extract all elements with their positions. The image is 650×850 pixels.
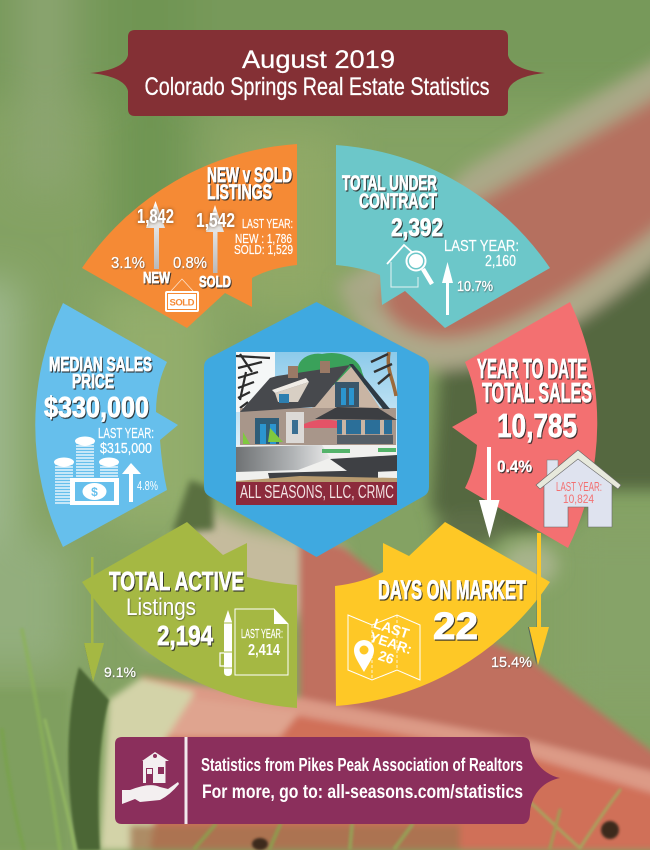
title line 2: Colorado Springs Real Estate Statistics [144, 73, 490, 101]
heading: DAYS ON MARKET [378, 575, 526, 605]
footer line 1: Statistics from Pikes Peak Association of Realtors [201, 755, 523, 775]
arrow down [479, 447, 500, 538]
last year [444, 238, 519, 270]
icon: map with last year: YEAR: [368, 629, 414, 657]
icon: coins and banknote: $ [91, 485, 98, 499]
arrow down [528, 533, 549, 665]
icon: house with last year: 10,824 [563, 492, 594, 506]
heading: MEDIAN SALES [49, 354, 152, 376]
icon: document with last year: LAST YEAR: [241, 626, 283, 641]
percent: 9.1% [104, 664, 136, 680]
logo banner: ALL SEASONS, LLC, CRMC [240, 482, 394, 502]
icon: document with last year: 2,414 [248, 642, 280, 659]
last year figures: LAST YEAR: [242, 217, 293, 231]
heading [342, 172, 437, 213]
arrow up [442, 262, 453, 315]
value: $330,000 [44, 392, 149, 424]
heading: TOTAL UNDER [342, 172, 437, 195]
last year: LAST YEAR: [98, 425, 154, 442]
icon: sold sign: SOLD [170, 298, 195, 308]
logo: house illustration [236, 352, 397, 484]
last year figures [234, 217, 293, 257]
panel: new v sold listings [82, 144, 297, 328]
percent: 15.4% [491, 654, 532, 671]
logo banner [236, 482, 397, 505]
panel: total active listings [82, 522, 297, 708]
panel: days on market [335, 522, 550, 706]
heading: NEW v SOLD [207, 164, 292, 187]
new label: NEW [143, 270, 171, 287]
last year [98, 425, 154, 457]
arrow down [84, 557, 104, 682]
footer line 2: For more, go to: all-seasons.com/statistics [202, 782, 523, 803]
title banner [90, 30, 545, 116]
icon: sold sign [165, 279, 199, 312]
arrow: new up [146, 201, 165, 269]
heading: PRICE [72, 371, 114, 393]
heading: CONTRACT [359, 190, 437, 213]
panel: year to date total sales [452, 302, 621, 548]
arrow: sold up [206, 205, 224, 273]
walls [240, 408, 396, 445]
icon: house with magnifier [387, 245, 432, 287]
new count: 1,842 [137, 206, 174, 228]
percent: 10.7% [457, 278, 493, 295]
sold label: SOLD [199, 274, 231, 291]
last year figures: SOLD: 1,529 [234, 243, 293, 257]
value: 22 [433, 606, 478, 648]
last year: $315,000 [100, 440, 152, 457]
arrow up [122, 463, 141, 502]
value: 10,785 [497, 407, 577, 444]
subheading: Listings [126, 594, 196, 621]
icon: map with last year: 26 [376, 647, 396, 667]
seeds [252, 821, 619, 850]
title line 1: August 2019 [242, 46, 395, 74]
value: 2,392 [391, 214, 443, 242]
icon: house in hand [122, 752, 179, 804]
divider [184, 737, 188, 824]
icon: house with last year: LAST YEAR: [556, 479, 602, 494]
sold count: 1,542 [196, 210, 235, 232]
percent: 0.4% [497, 457, 532, 476]
icon: document with last year [235, 609, 288, 675]
last year: LAST YEAR: [444, 238, 519, 255]
windows and porch [279, 394, 289, 403]
heading [207, 164, 292, 204]
sold percent: 0.8% [173, 255, 207, 272]
icon: house with last year [536, 450, 621, 527]
trees [236, 352, 396, 408]
new percent: 3.1% [111, 255, 145, 272]
panel: median sales price [35, 303, 178, 547]
icon: pen [220, 610, 232, 676]
heading: LISTINGS [207, 181, 272, 204]
heading: TOTAL ACTIVE [109, 566, 244, 596]
heading [49, 354, 152, 393]
panel: total under contract [336, 145, 550, 328]
icon: map with last year [348, 615, 420, 680]
footer banner [115, 737, 560, 824]
icon: map with last year: LAST [372, 615, 412, 642]
ground [236, 445, 397, 484]
roofs [240, 365, 350, 412]
panel: logo hexagon [204, 302, 429, 557]
last year: 2,160 [485, 253, 516, 270]
heading [477, 353, 592, 408]
last year figures: NEW : 1,786 [235, 232, 292, 246]
value: 2,194 [157, 620, 213, 651]
percent: 4.8% [137, 478, 158, 493]
icon: coins and banknote [54, 436, 119, 505]
